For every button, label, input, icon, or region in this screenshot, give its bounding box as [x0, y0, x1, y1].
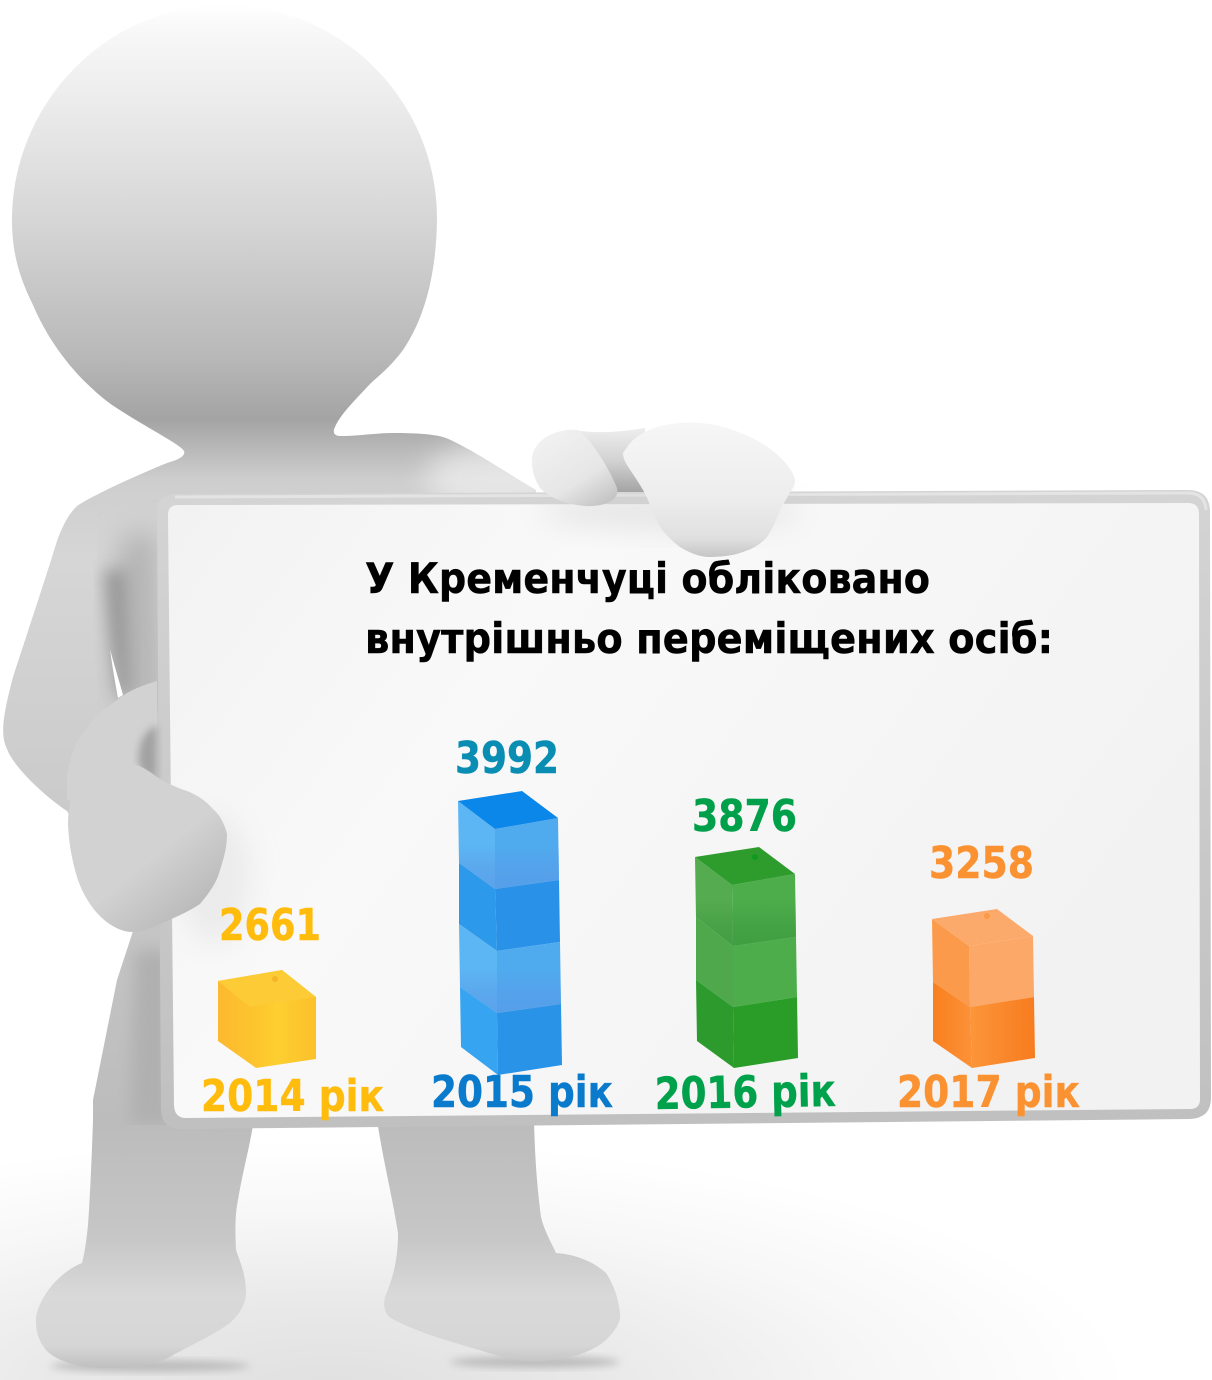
- column: [458, 791, 562, 1075]
- right leg: [377, 1120, 620, 1361]
- palm: [68, 762, 227, 932]
- left hand: [67, 681, 227, 932]
- whiteboard: [157, 490, 1211, 1129]
- figure: head and torso silhouette: [3, 5, 565, 1125]
- title: У Кременчуці обліковано: [365, 554, 930, 603]
- bar: 2015: [431, 733, 613, 1118]
- bar: 2014: [201, 900, 384, 1122]
- value 2661: 2661: [219, 900, 321, 951]
- bar: 2017: [897, 838, 1080, 1118]
- value 3992: 3992: [455, 733, 559, 784]
- bar: 2016: [654, 791, 836, 1120]
- arm gap highlight: [110, 649, 123, 698]
- label 2017 рік: 2017 рік: [897, 1067, 1080, 1118]
- label 2015 рік: 2015 рік: [431, 1067, 613, 1118]
- floor shadow: [0, 1130, 1212, 1380]
- column: [695, 847, 798, 1068]
- whiteboard surface: [168, 503, 1200, 1118]
- bridge between finger and palm: [575, 428, 650, 492]
- palm: [623, 423, 795, 557]
- right hand: [532, 423, 795, 557]
- value 3258: 3258: [929, 838, 1034, 889]
- cube: [218, 970, 316, 1068]
- title: внутрішньо переміщених осіб:: [365, 614, 1053, 663]
- finger: [532, 430, 617, 506]
- column: [932, 909, 1035, 1068]
- label 2016 рік: 2016 рік: [654, 1066, 836, 1120]
- label 2014 рік: 2014 рік: [201, 1071, 384, 1122]
- whiteboard frame: [157, 490, 1211, 1129]
- left leg: [36, 1120, 253, 1368]
- figure: legs: [36, 1120, 620, 1368]
- thumb: [67, 681, 157, 800]
- title: [365, 554, 1053, 663]
- value 3876: 3876: [692, 791, 797, 842]
